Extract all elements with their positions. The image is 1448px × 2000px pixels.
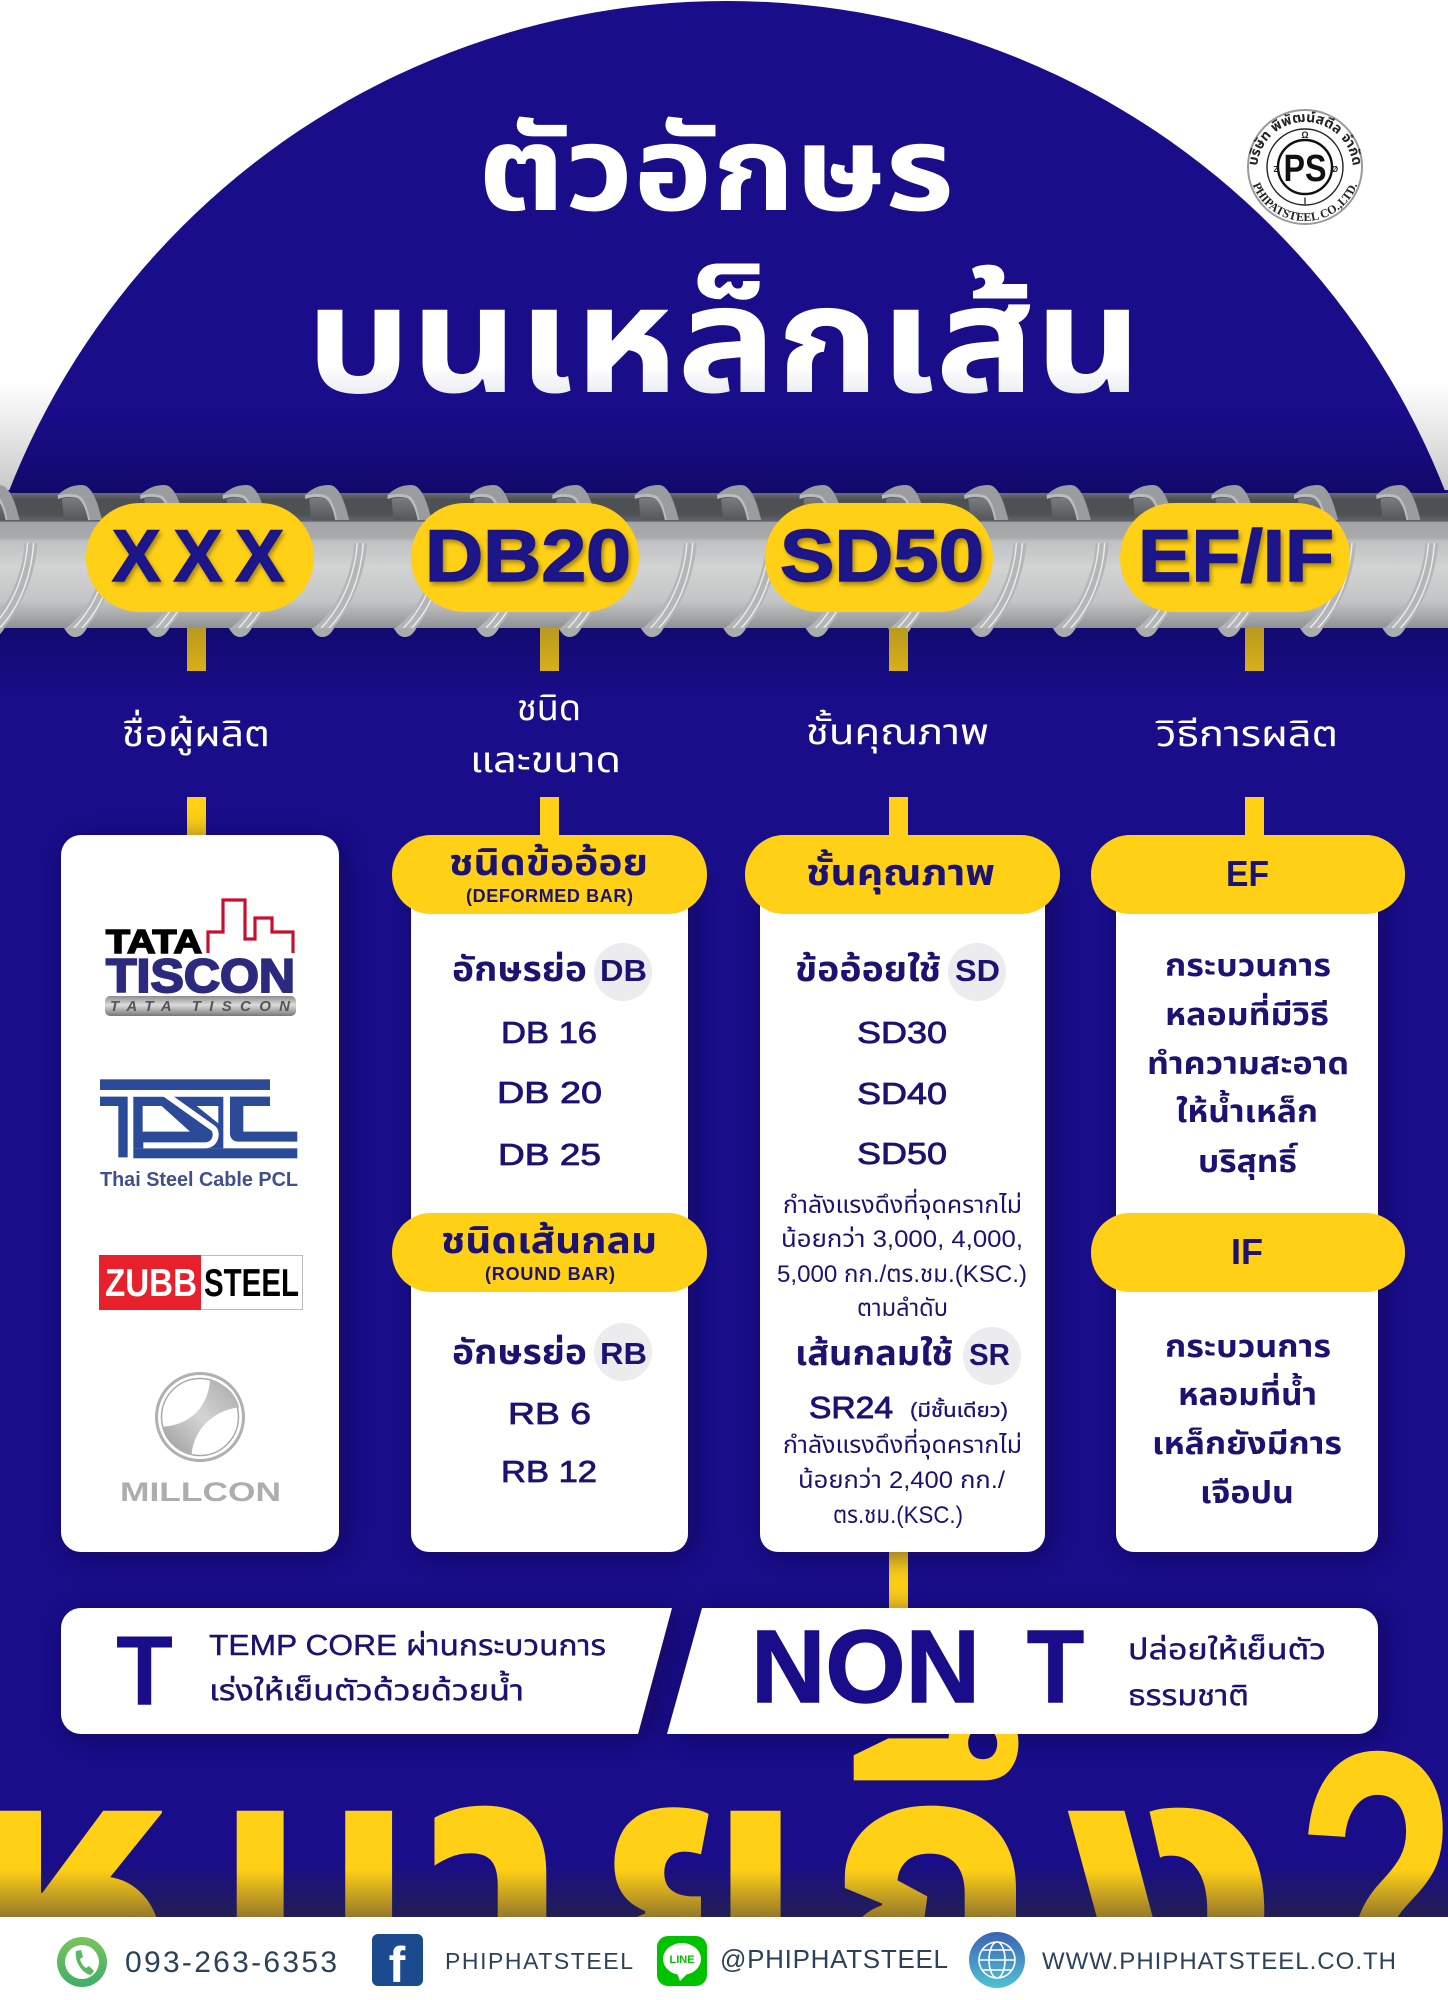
deformed uses SD: ข้ออ้อยใช้	[795, 950, 941, 989]
logo: Phiphat Steel stamp: Ø	[1332, 165, 1338, 174]
SD grades: SD30	[857, 1015, 947, 1050]
SD yield strength note: น้อยกว่า 3,000, 4,000,	[781, 1225, 1023, 1253]
EF description: บริสุทธิ์	[1198, 1142, 1299, 1180]
abbreviation DB: อักษรย่อ	[452, 950, 587, 989]
pill: SD50	[765, 503, 993, 612]
SD yield strength note: ตามลำดับ	[857, 1295, 948, 1322]
panel: NON T: NON	[751, 1609, 980, 1724]
DB sizes: DB 25	[498, 1137, 601, 1172]
pill: EF/IF	[1120, 503, 1350, 612]
icon: phone	[57, 1937, 107, 1987]
IF description: เจือปน	[1200, 1475, 1294, 1510]
website: WWW.PHIPHATSTEEL.CO.TH	[1042, 1948, 1396, 1975]
logo: Phiphat Steel stamp: Ω	[1301, 130, 1309, 140]
abbreviation RB: RB	[600, 1336, 647, 1371]
SD yield strength note: กำลังแรงดึงที่จุดครากไม่	[783, 1188, 1022, 1220]
SR24 grade: (มีชั้นเดียว)	[910, 1397, 1008, 1422]
logo: Phiphat Steel stamp: บริษัท พิพัฒน์สตีล จำกัด	[1249, 112, 1361, 165]
logo: Phiphat Steel stamp: I	[1304, 196, 1306, 206]
panel: T: TEMP CORE ผ่านกระบวนการ	[209, 1630, 606, 1662]
EF description: กระบวนการ	[1165, 948, 1331, 983]
logo: Phiphat Steel stamp: PHIPATSTEEL CO.,LTD.	[1252, 182, 1357, 222]
pill: deformed bar: (DEFORMED BAR)	[466, 886, 633, 906]
column captions: ชนิด	[517, 687, 581, 728]
SD grades	[857, 1015, 947, 1171]
panel: T: เร่งให้เย็นตัวด้วยด้วยน้ำ	[209, 1670, 524, 1707]
IF description: หลอมที่น้ำ	[1178, 1372, 1317, 1412]
deformed uses SD	[795, 943, 1006, 1001]
pill: XXX: XXX	[112, 516, 284, 597]
abbreviation RB: อักษรย่อ	[452, 1333, 587, 1372]
SR24 grade	[809, 1390, 1008, 1425]
panel: manufacturers	[61, 835, 339, 1552]
pill: round bar: ชนิดเส้นกลม	[441, 1220, 657, 1261]
EF description	[1147, 948, 1349, 1180]
panel: NON T	[667, 1608, 1378, 1734]
icon: line: LINE	[669, 1954, 695, 1966]
panel: T: T	[116, 1615, 173, 1726]
pill: quality grade	[745, 835, 1060, 914]
DB sizes: DB 16	[501, 1015, 597, 1050]
DB sizes	[497, 1015, 602, 1172]
pill: DB20: DB20	[425, 516, 631, 597]
title: ตัวอักษร	[478, 104, 954, 236]
pill: round bar	[392, 1213, 707, 1292]
icon: globe	[969, 1932, 1025, 1988]
line id: @PHIPHATSTEEL	[720, 1944, 948, 1974]
column captions: ชื่อผู้ผลิต	[122, 709, 270, 755]
SR yield strength note: ตร.ชม.(KSC.)	[833, 1502, 963, 1529]
RB sizes	[501, 1396, 597, 1489]
column captions: ชั้นคุณภาพ	[806, 709, 989, 753]
pill: IF: IF	[1231, 1231, 1263, 1272]
panel: quality grade	[745, 835, 1060, 1552]
logo: Zubb Steel	[99, 1255, 302, 1310]
icon: facebook: f	[389, 1937, 406, 1993]
abbreviation RB	[452, 1323, 652, 1381]
icon: line	[657, 1936, 707, 1986]
pill: round bar: (ROUND BAR)	[485, 1264, 615, 1284]
logo: Phiphat Steel stamp: Z	[1274, 165, 1279, 174]
logo: Millcon: MILLCON	[120, 1477, 281, 1507]
panel: NON T: T	[1027, 1609, 1084, 1724]
pill: EF	[1091, 835, 1405, 914]
pill: deformed bar	[392, 835, 707, 914]
footer	[0, 1917, 1448, 2000]
SD grades: SD40	[857, 1076, 947, 1111]
DB sizes: DB 20	[497, 1075, 602, 1110]
pill: deformed bar: ชนิดข้ออ้อย	[449, 842, 648, 883]
connector posts	[187, 628, 1264, 1610]
pill: SD50: SD50	[780, 516, 984, 597]
deformed uses SD: SD	[955, 953, 1000, 988]
RB sizes: RB 6	[508, 1396, 591, 1431]
code pills on rebar	[86, 503, 1350, 612]
round bar uses SR: เส้นกลมใช้	[795, 1334, 953, 1373]
SR yield strength note: กำลังแรงดึงที่จุดครากไม่	[783, 1428, 1022, 1460]
logo: Thai Steel Cable: Thai Steel Cable PCL	[100, 1169, 298, 1191]
RB sizes: RB 12	[501, 1454, 597, 1489]
icon: facebook	[372, 1934, 423, 1993]
SD yield strength note: 5,000 กก./ตร.ชม.(KSC.)	[777, 1261, 1027, 1288]
logo: Tata Tiscon: TISCON	[106, 949, 295, 1002]
column captions: วิธีการผลิต	[1155, 713, 1338, 754]
EF description: ให้น้ำเหล็ก	[1176, 1089, 1318, 1129]
pill: DB20	[411, 503, 639, 612]
logo: Zubb Steel: ZUBB	[105, 1262, 197, 1305]
title: บนเหล็กเส้น	[306, 256, 1142, 424]
IF description	[1152, 1329, 1342, 1510]
logo: Tata Tiscon: TATA	[106, 923, 202, 960]
EF description: ทำความสะอาด	[1147, 1046, 1349, 1081]
panel: type and size	[392, 835, 707, 1552]
panel: T	[61, 1608, 672, 1734]
logo: Tata Tiscon: TATA TISCON	[110, 998, 291, 1015]
IF description: กระบวนการ	[1165, 1329, 1331, 1364]
pill: XXX	[86, 503, 314, 612]
facebook name: PHIPHATSTEEL	[445, 1948, 633, 1974]
panel: NON T: ปล่อยให้เย็นตัว	[1128, 1634, 1326, 1666]
round bar uses SR: SR	[969, 1337, 1010, 1372]
pill: EF/IF: EF/IF	[1138, 516, 1334, 597]
panel: production method	[1091, 835, 1405, 1552]
column captions: และขนาด	[470, 739, 621, 780]
round bar uses SR	[795, 1327, 1021, 1385]
logo: Thai Steel Cable	[100, 1079, 298, 1191]
SR yield strength note	[783, 1428, 1022, 1529]
steel rebar	[0, 483, 1448, 637]
logo: Phiphat Steel stamp	[1247, 109, 1363, 225]
abbreviation DB	[452, 943, 652, 1001]
SD grades: SD50	[857, 1136, 947, 1171]
abbreviation DB: DB	[600, 953, 647, 988]
logo: Tata Tiscon	[105, 900, 296, 1016]
pill: quality grade: ชั้นคุณภาพ	[806, 848, 995, 894]
SR24 grade: SR24	[809, 1390, 893, 1425]
title	[306, 104, 1142, 424]
logo: Phiphat Steel stamp: PS	[1284, 148, 1326, 190]
logo: Millcon	[120, 1374, 281, 1507]
SR yield strength note: น้อยกว่า 2,400 กก./	[798, 1466, 1005, 1494]
column captions	[122, 687, 1338, 780]
phone number: 093-263-6353	[125, 1946, 337, 1979]
pill: EF: EF	[1226, 853, 1269, 894]
big question text	[0, 1734, 1448, 1917]
SD yield strength note	[777, 1188, 1027, 1322]
pill: IF	[1091, 1213, 1405, 1292]
logo: Zubb Steel: STEEL	[204, 1262, 299, 1305]
IF description: เหล็กยังมีการ	[1152, 1426, 1342, 1461]
EF description: หลอมที่มีวิธี	[1165, 992, 1329, 1032]
panel: NON T: ธรรมชาติ	[1128, 1680, 1249, 1712]
